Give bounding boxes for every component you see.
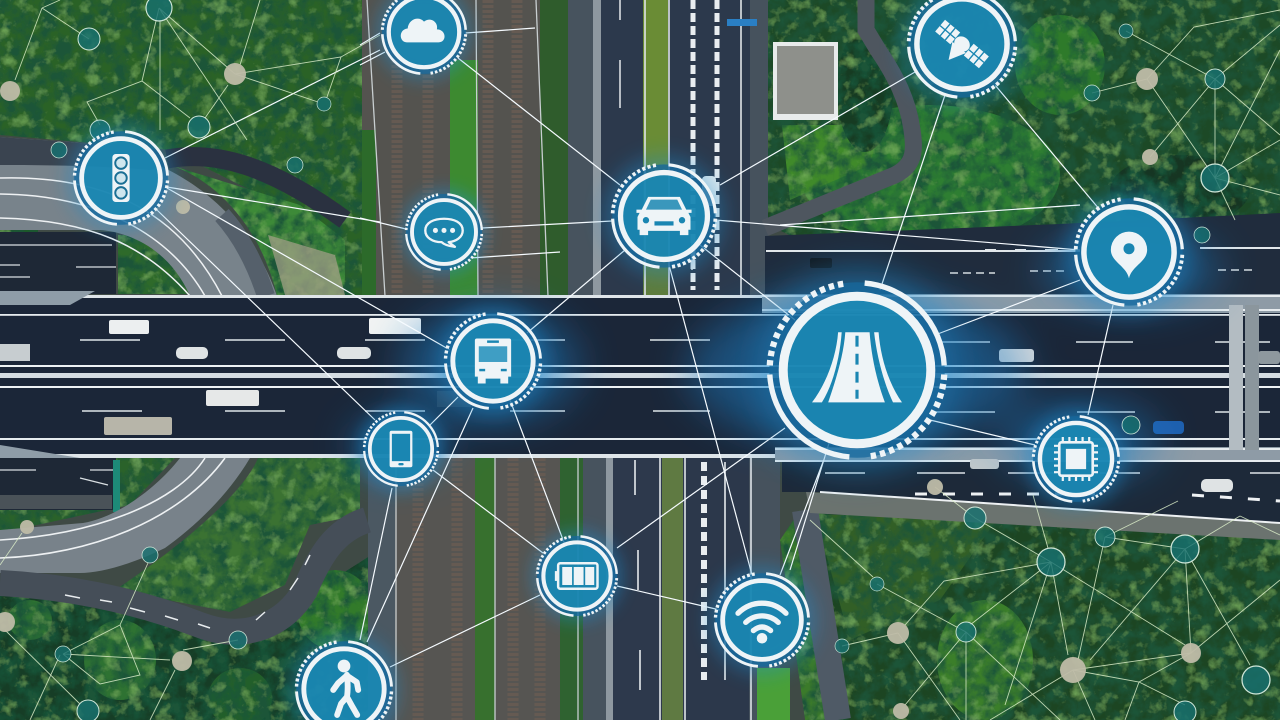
icon: car badge: [605, 157, 723, 275]
icon: bus badge: [438, 306, 548, 416]
upper right road: [765, 213, 1280, 296]
vertical motorways bottom: [606, 458, 838, 720]
railway corridor top: [362, 0, 593, 296]
sandy clearing beside top-left ramp: [268, 235, 345, 295]
icon: cloud badge: [376, 0, 472, 80]
icon: traffic light badge: [67, 124, 175, 232]
icon: smartphone badge: [358, 406, 444, 492]
vehicles: [0, 19, 1280, 492]
main connection lines between icons: [157, 28, 1113, 667]
winding side road top right: [765, 0, 913, 228]
icon: road badge: [756, 269, 958, 471]
vertical motorways top: [593, 0, 768, 296]
icon: chat badge: [400, 188, 488, 276]
icon: wifi badge: [708, 566, 816, 674]
railway corridor bottom: [368, 458, 613, 720]
icon: location pin badge: [1067, 190, 1191, 314]
icon: microchip badge: [1027, 410, 1125, 508]
main elevated highway: [0, 295, 1280, 458]
bridge guard rails: [0, 291, 1280, 462]
building roof: [773, 42, 838, 120]
left stub roads: [0, 232, 120, 512]
curved ramp top left: [0, 137, 345, 296]
curved ramps bottom left: [0, 458, 367, 632]
icon: battery badge: [531, 530, 623, 622]
icon: satellite badge: [900, 0, 1024, 106]
lower right road: [782, 460, 1280, 540]
icon: pedestrian badge: [289, 634, 399, 720]
blue glow over the road: [350, 230, 1220, 480]
